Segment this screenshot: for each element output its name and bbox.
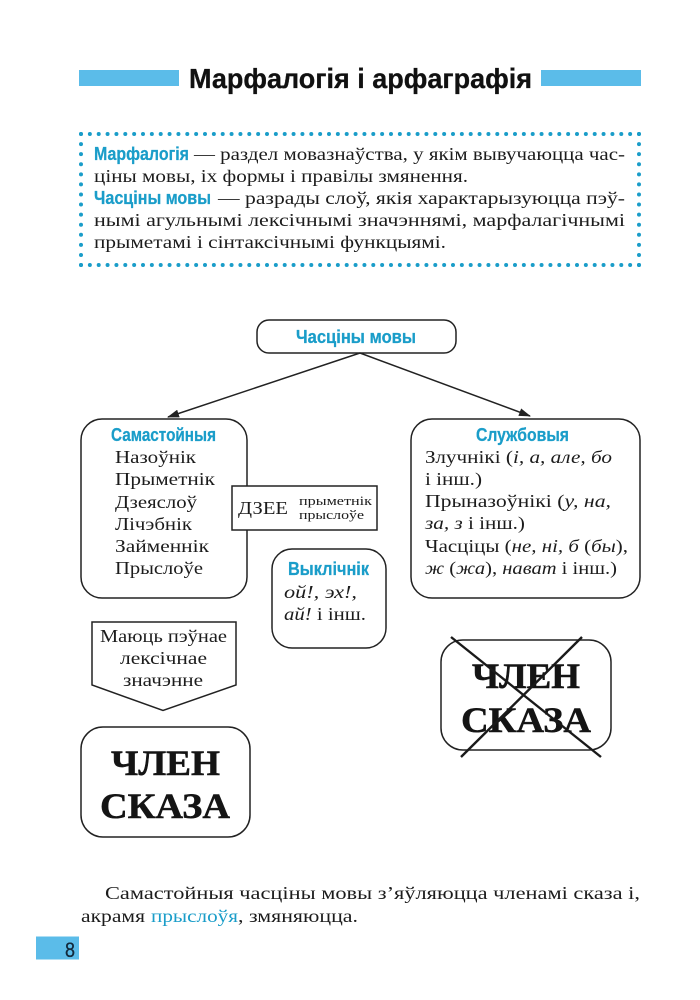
text block: closing note: , змяняюцца. (238, 906, 358, 926)
box: participle: прыслоўе (299, 508, 365, 522)
box: crossed-out sentence member: СКАЗА (461, 700, 591, 740)
panel: independent parts (81, 419, 247, 598)
panel: independent parts: Прыметнік (115, 469, 216, 489)
definition: parts of speech: — разрады слоў, якія характарызуюцца пэў- (217, 188, 625, 208)
text block: closing note: прыслоўя (151, 906, 238, 926)
root node: parts of speech (257, 320, 456, 353)
definition: morphology: Марфалогія (94, 144, 189, 164)
definition: morphology: — раздел мовазнаўства, у якім вывучаюцца час- (193, 144, 625, 164)
panel: interjection (272, 549, 386, 648)
definition: parts of speech: прыметамі і сінтаксічнымі функцыямі. (94, 232, 446, 252)
box: crossed-out sentence member (441, 637, 611, 757)
root node: parts of speech: Часціны мовы (296, 327, 416, 347)
panel: independent parts: Прыслоўе (115, 558, 203, 578)
arrow: to auxiliary (360, 353, 530, 416)
title (79, 63, 641, 94)
panel: interjection: ой!, эх!, (284, 582, 357, 602)
page number (36, 936, 79, 962)
box: sentence member: СКАЗА (100, 786, 230, 826)
definition: parts of speech: Часціны мовы (94, 188, 211, 208)
panel: independent parts: Дзеяслоў (115, 492, 197, 512)
panel: independent parts: Займеннік (115, 536, 210, 556)
box: participle: прыметнік (299, 494, 373, 508)
panel: independent parts: Лічэбнік (115, 514, 193, 534)
panel: independent parts: Назоўнік (115, 447, 197, 467)
panel: interjection: ай! і інш. (284, 604, 366, 624)
panel: auxiliary parts: Прыназоўнікі ( у, на, (425, 491, 611, 511)
panel: auxiliary parts: Злучнікі ( і, а, але, бо (425, 447, 612, 467)
box: participle (232, 486, 377, 530)
definition: parts of speech: нымі агульнымі лексічнымі значэннямі, марфалагічнымі (94, 210, 625, 230)
panel: auxiliary parts: за, з і інш.) (424, 513, 525, 533)
panel: definitions (81, 134, 640, 266)
panel: auxiliary parts (411, 419, 640, 598)
callout: lexical meaning: значэнне (123, 670, 203, 690)
panel: interjection: Выклічнік (288, 559, 370, 579)
callout: lexical meaning: Маюць пэўнае (100, 626, 227, 646)
panel: auxiliary parts: і інш.) (425, 469, 482, 489)
callout: lexical meaning (92, 622, 236, 710)
box: sentence member: ЧЛЕН (111, 743, 220, 783)
title: Марфалогія і арфаграфія (189, 63, 532, 94)
box: participle: ДЗЕЕ (238, 498, 288, 518)
panel: auxiliary parts: Службовыя (476, 425, 569, 445)
panel: auxiliary parts: ж (жа), нават і інш.) (425, 558, 617, 578)
text block: closing note: Самастойныя часціны мовы з’яўляюцца членамі сказа і, (105, 883, 640, 903)
arrow: to independent (168, 353, 360, 417)
box: crossed-out sentence member: ЧЛЕН (472, 656, 580, 696)
definition: morphology: ціны мовы, іх формы і правілы змянення. (94, 166, 468, 186)
definition: parts of speech (94, 188, 625, 252)
page number: 8 (65, 939, 75, 962)
definition: morphology (94, 144, 625, 186)
panel: independent parts: Самастойныя (111, 425, 216, 445)
text block: closing note (81, 883, 640, 926)
panel: auxiliary parts: Часціцы ( не, ні, б (бы), (425, 536, 628, 556)
box: sentence member (81, 727, 250, 837)
text block: closing note: акрамя (81, 906, 145, 926)
callout: lexical meaning: лексічнае (120, 648, 207, 668)
